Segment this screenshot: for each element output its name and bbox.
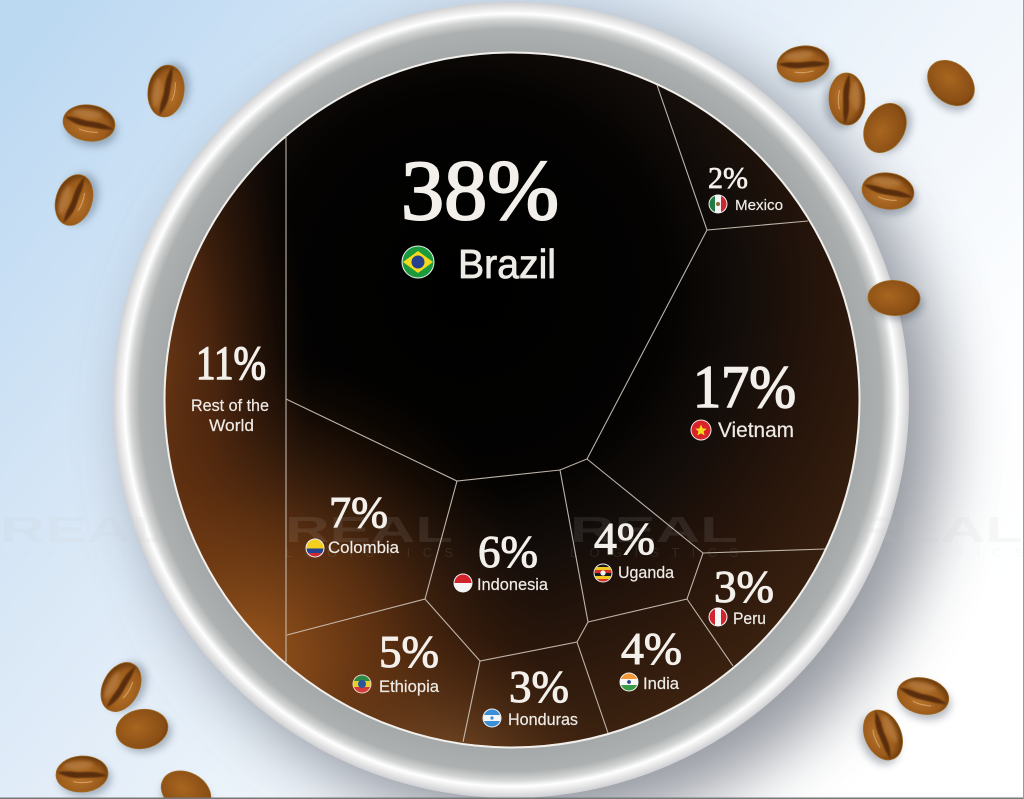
value: Mexico: 2% — [708, 160, 748, 195]
value: India: 4% — [621, 624, 682, 674]
coffee cup — [113, 2, 909, 798]
label: Colombia: Colombia — [328, 538, 400, 557]
India cell — [620, 633, 681, 692]
label: Honduras: Honduras — [508, 710, 578, 729]
flag: India — [620, 672, 638, 692]
label: Rest of the World: World — [209, 416, 254, 435]
label: India: India — [643, 674, 680, 693]
watermark logos: REAL — [285, 509, 453, 550]
Indonesia cell — [454, 536, 548, 592]
value: Brazil: 38% — [401, 142, 559, 238]
Rest of the World cell — [191, 337, 269, 435]
voronoi cell borders — [286, 85, 825, 742]
watermark logos: REAL — [0, 509, 170, 550]
Mexico cell — [708, 168, 782, 214]
label: Rest of the World — [191, 396, 269, 435]
flag: Ethiopia — [352, 674, 372, 694]
value: Honduras: 3% — [509, 662, 569, 712]
coffee beans: top right — [775, 43, 986, 321]
flag: Colombia — [306, 538, 324, 558]
value: Uganda: 4% — [594, 514, 655, 564]
value: Ethiopia: 5% — [379, 627, 439, 677]
value: Peru: 3% — [714, 562, 774, 612]
label: Mexico: Mexico — [735, 197, 783, 214]
label: Indonesia: Indonesia — [477, 575, 549, 594]
watermark logos: LOGISTICS — [285, 545, 453, 560]
flag: Brazil — [402, 246, 434, 278]
label: Vietnam: Vietnam — [718, 419, 794, 442]
label: Peru: Peru — [733, 609, 766, 628]
flag: Vietnam — [690, 419, 712, 441]
Colombia cell — [306, 497, 400, 558]
watermark logos — [0, 509, 1023, 560]
label: Brazil: Brazil — [458, 241, 556, 287]
flag: Indonesia — [454, 574, 472, 592]
label: Rest of the World: Rest of the — [191, 396, 269, 415]
Honduras cell — [482, 671, 578, 728]
watermark logos: REAL — [855, 509, 1023, 550]
coffee beans: bottom left — [55, 653, 221, 799]
flag: Peru — [708, 608, 728, 626]
Brazil cell — [402, 160, 558, 279]
Vietnam cell — [690, 366, 795, 440]
coffee beans: bottom right — [851, 673, 955, 771]
watermark logos: REAL — [570, 509, 738, 550]
flag: Honduras — [482, 708, 502, 728]
cup rim — [113, 2, 909, 798]
Peru cell — [708, 571, 773, 626]
watermark logos: LOGISTICS — [855, 545, 1023, 560]
label: Uganda: Uganda — [618, 563, 675, 582]
value: Indonesia: 6% — [478, 527, 538, 577]
Ethiopia cell — [352, 636, 440, 696]
value: Vietnam: 17% — [693, 354, 796, 420]
value: Colombia: 7% — [329, 488, 388, 537]
value: Rest of the World: 11% — [196, 337, 266, 390]
coffee surface — [164, 52, 860, 748]
flag: Mexico — [708, 194, 728, 214]
Uganda cell — [594, 523, 674, 582]
watermark logos: LOGISTICS — [0, 545, 170, 560]
flag: Uganda — [594, 564, 612, 582]
watermark logos: LOGISTICS — [570, 545, 738, 560]
label: Ethiopia: Ethiopia — [379, 677, 440, 696]
cup shadow — [138, 23, 942, 799]
coffee beans: top left — [49, 60, 193, 232]
